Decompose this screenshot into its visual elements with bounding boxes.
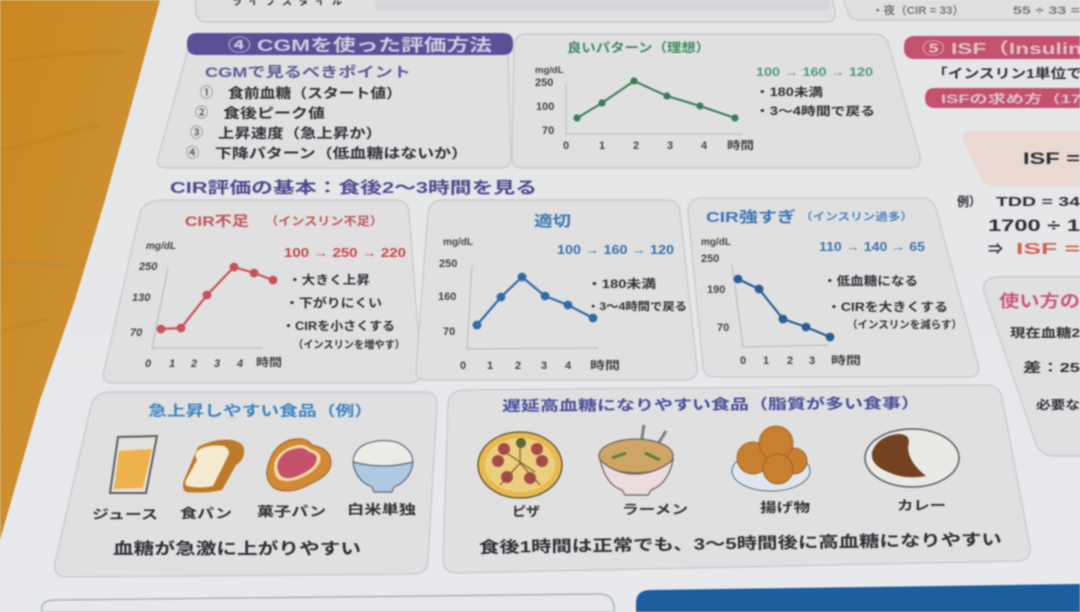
caption: rapid rise foods: 血糖が急激に上がりやすい [113,539,361,558]
icon: rice bowl [353,440,413,492]
line chart: good pattern: 4 [701,140,708,152]
line chart: CIR insufficient: 時間 [256,355,282,369]
panel: delayed hyperglycemia foods [443,385,1030,573]
labels: delayed foods: ラーメン [622,502,688,517]
values: appropriate: 100 → 160 → 120 [557,243,674,257]
subheading: CGMで見るべきポイント [205,64,411,80]
panel: ISF column [904,36,1080,456]
line chart: appropriate: 1 [487,360,493,372]
bullets: CIR too strong [823,273,962,331]
line chart: CIR insufficient: 130 [132,292,151,304]
bullets: good pattern [755,85,875,118]
line chart: CIR insufficient: 4 [236,358,243,370]
bullets: CIR insufficient: （インスリンを増やす） [293,338,405,351]
bullets: CIR insufficient: ・CIRを小さくする [282,319,395,333]
labels: delayed foods: ピザ [512,504,540,519]
line chart: good pattern: 100 [536,101,554,113]
line chart: appropriate: 2 [515,360,521,372]
line chart: CIR insufficient: 250 [138,261,158,273]
heading: good pattern: 良いパターン（理想） [567,40,710,55]
checklist [186,85,468,161]
labels: rapid rise foods: 菓子パン [257,504,326,519]
panel: top right remnant [842,0,1080,20]
line chart: good pattern: 1 [599,140,605,152]
heading: CIR insufficient [185,213,383,229]
checklist: ① [200,85,213,100]
line chart: appropriate: 3 [541,360,547,372]
line chart: CIR insufficient: 1 [169,358,175,370]
line chart: CIR too strong: 時間 [831,353,861,367]
panel: rapid rise foods [55,392,437,577]
line chart: appropriate: 時間 [590,358,620,372]
line chart: CIR too strong [701,237,861,367]
bullets: appropriate [587,276,687,313]
heading: CGM evaluation: ④ CGMを使った評価方法 [228,35,492,55]
panel: how to use: 差：25 [1023,360,1080,375]
line chart: CIR insufficient: 0 [145,358,152,370]
panel: how to use: 使い方の [999,291,1080,311]
line chart: appropriate: 70 [443,326,455,338]
checklist: 食前血糖（スタート値） [228,85,402,101]
line chart: good pattern [535,65,754,152]
labels: rapid rise foods: 食パン [180,506,232,521]
line chart: CIR insufficient: mg/dL [146,241,176,252]
line chart: good pattern: 時間 [727,138,754,152]
line chart: CIR too strong: 3 [809,355,815,367]
heading: rapid rise foods: 急上昇しやすい食品（例） [148,402,373,420]
panel: how to use [984,277,1080,456]
line chart: CIR too strong: 2 [787,355,793,367]
heading: CIR insufficient: （インスリン不足） [265,214,383,228]
bullets: appropriate: ・180未満 [587,276,656,291]
heading: CIR too strong: CIR強すぎ [706,208,796,226]
panel: good pattern [512,34,920,168]
labels: delayed foods [512,498,946,519]
labels: rapid rise foods: 白米単独 [347,502,416,517]
panel: appropriate [416,200,697,380]
line chart: appropriate: 0 [460,360,466,372]
bullets: CIR insufficient: ・大きく上昇 [288,272,370,287]
heading: ISF: ⑤ ISF（Insulin [922,40,1080,58]
worked example: 例） [957,195,981,209]
line chart: good pattern: 2 [633,140,639,152]
bullets: CIR insufficient [282,272,405,351]
heading: CIR too strong [706,208,913,226]
checklist: ④ [186,145,199,160]
bullets: good pattern: ・3〜4時間で戻る [755,104,875,118]
worked example: 1700 ÷ 1 [988,216,1080,235]
subheading: ISF formula [925,88,1080,108]
line chart: CIR insufficient [130,241,282,370]
line chart: CIR insufficient: 70 [130,327,143,339]
panel: how to use: 現在血糖2 [1010,325,1080,340]
line chart: appropriate: 160 [438,291,456,303]
wooden table [0,0,160,540]
panel: CIR insufficient [103,200,421,383]
bullets: appropriate: ・3〜4時間で戻る [587,299,687,313]
labels: rapid rise foods: ジュース [92,507,158,522]
line chart: appropriate: 250 [439,258,457,270]
line chart: CIR too strong: 70 [717,322,729,334]
line chart: good pattern: 250 [535,77,553,89]
heading: appropriate: 適切 [534,212,571,230]
ISF description: 「インスリン1単位で [932,66,1080,81]
line chart: CIR too strong: mg/dL [701,237,731,248]
line chart: CIR too strong: 190 [707,284,725,296]
bullets: CIR too strong: ・CIRを大きくする [827,299,948,314]
panel: top left remnant [195,0,835,22]
icon: juice [110,436,157,493]
heading: ISF [904,36,1080,59]
heading: CGM evaluation [187,33,513,55]
bullets: good pattern: ・180未満 [755,85,824,99]
worked example: ⇒ [988,241,1003,258]
checklist: 下降パターン（低血糖はないか） [215,145,468,161]
values: CIR too strong: 110 → 140 → 65 [819,240,925,254]
heading: CIR basics: CIR評価の基本：食後2〜3時間を見る [170,178,537,197]
worked example: TDD = 34 [996,194,1080,209]
line chart: good pattern: 0 [563,140,569,152]
labels: delayed foods: カレー [897,498,946,513]
labels: delayed foods: 揚げ物 [760,500,810,515]
formula box: ISF = [1023,149,1080,168]
line chart: good pattern: 70 [542,125,554,137]
panel: CIR too strong [688,198,979,377]
line chart: appropriate: 4 [565,360,572,372]
panel: top right remnant: ・夜（CIR = 33） [872,3,964,17]
worked example [957,194,1080,258]
icon: pizza [478,432,562,498]
labels: rapid rise foods [92,502,416,522]
bullets: CIR insufficient: ・下がりにくい [285,295,382,310]
line chart: CIR too strong: 1 [763,355,769,367]
formula box [962,130,1080,186]
checklist: ③ [190,125,203,140]
icon: bread [183,440,244,493]
panel: bottom blue banner [636,584,1080,612]
heading: CIR too strong: （インスリン過多） [800,210,913,223]
icon: fried food [732,426,810,491]
line chart: appropriate: mg/dL [443,237,473,248]
checklist: 食後ピーク値 [223,105,326,121]
panel: CGM points [157,33,513,168]
line chart: CIR insufficient: 2 [190,358,197,370]
subheading: ISF formula: ISFの求め方（17 [941,91,1080,106]
checklist: ② [195,105,208,120]
line chart: CIR too strong: 250 [701,253,719,265]
line chart: CIR insufficient: 3 [214,358,220,370]
bullets: CIR too strong: （インスリンを減らす） [847,318,962,331]
line chart: good pattern: mg/dL [535,65,564,76]
line chart: good pattern: 3 [667,140,673,152]
line chart: appropriate [438,237,620,372]
line chart: CIR too strong: 0 [740,355,746,367]
panel: how to use: 必要な [1036,397,1080,412]
values: good pattern: 100 → 160 → 120 [756,65,873,79]
panel: bottom left remnant [42,594,614,612]
bullets: CIR too strong: ・低血糖になる [823,273,918,288]
icon: jam bun [267,439,331,491]
icon: curry [865,429,959,487]
checklist: 上昇速度（急上昇か） [218,125,382,141]
panel: top right remnant: 55 ÷ 33 = [1013,5,1080,17]
values: CIR insufficient: 100 → 250 → 220 [284,246,406,260]
icon: ramen [599,425,673,495]
caption: delayed foods: 食後1時間は正常でも、3〜5時間後に高血糖になりやすい [479,530,1002,557]
worked example: ISF = [1016,241,1080,258]
heading: delayed foods: 遅延高血糖になりやすい食品（脂質が多い食事） [502,394,920,415]
heading: CIR insufficient: CIR不足 [185,213,249,229]
